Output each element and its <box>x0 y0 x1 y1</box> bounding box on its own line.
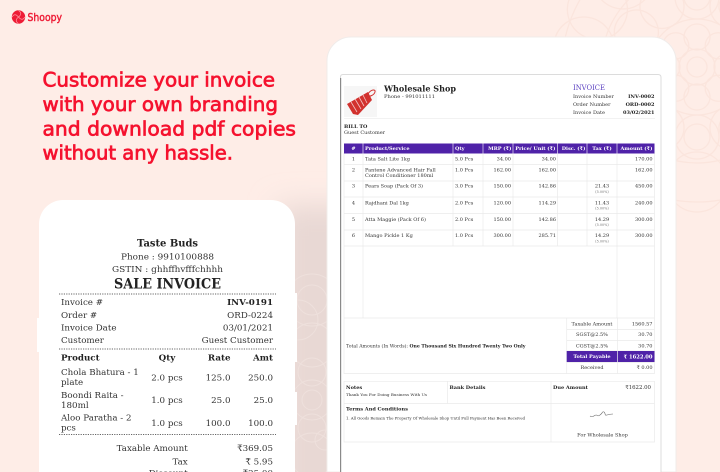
table rows: 1.0 Pcs <box>455 168 474 174</box>
receipt invoice details: INV-0191 <box>227 298 273 308</box>
table header row: Qty <box>455 146 466 152</box>
table header row: Price/ Unit (₹) <box>515 145 556 152</box>
invoice header: Wholesale Shop <box>383 84 456 94</box>
table rows: (5.00%) <box>595 206 609 210</box>
table rows: Rajdhani Dal 1kg <box>365 200 410 206</box>
panel: receipt <box>37 200 297 472</box>
receipt invoice details: 03/01/2021 <box>223 324 273 334</box>
table rows: 11.43 <box>595 200 609 206</box>
table rows: 5 <box>352 217 355 223</box>
receipt item table: Aloo Paratha - 2 <box>60 414 132 424</box>
receipt header <box>112 237 223 292</box>
total payable: Total Payable <box>573 354 611 360</box>
table rows: Mango Pickle 1 Kg <box>365 233 414 239</box>
receipt header: Phone : 9910100888 <box>121 252 214 262</box>
decorative mandala top right <box>549 0 720 212</box>
table rows <box>352 156 652 244</box>
invoice header: ORD-0002 <box>626 102 655 108</box>
table rows: 300.00 <box>494 233 511 239</box>
table rows: 2.0 Pcs <box>455 217 474 223</box>
headline: without any hassle. <box>42 142 233 164</box>
totals block: 30.70 <box>638 343 652 349</box>
receipt invoice details: Order # <box>61 311 97 321</box>
receipt item table: Chola Bhatura - 1 <box>61 368 139 378</box>
receipt invoice details: Invoice # <box>61 298 103 308</box>
receipt item table: Amt <box>252 354 273 364</box>
invoice header: Invoice Number <box>573 94 614 100</box>
tablet side shadow <box>278 205 358 472</box>
bill to: BILL TO <box>344 124 368 130</box>
notes and signature block <box>344 381 654 442</box>
receipt item table: Qty <box>159 354 176 364</box>
totals block: Received <box>580 365 604 371</box>
table header row: Tax (₹) <box>592 145 612 152</box>
terms: Terms And Conditions <box>346 406 408 412</box>
bank details: Bank Details <box>450 385 486 391</box>
invoice header: Order Number <box>573 102 611 108</box>
table rows: 2 <box>352 168 355 174</box>
receipt invoice details: Customer <box>61 336 105 346</box>
tablet body <box>327 37 676 472</box>
receipt invoice details: Invoice Date <box>61 324 116 334</box>
totals block <box>344 318 654 374</box>
receipt item table: pcs <box>61 424 76 434</box>
receipt item table: 180ml <box>61 401 89 411</box>
receipt item table: Product <box>61 354 100 364</box>
table rows: 5.0 Pcs <box>455 156 474 162</box>
headline: Customize your invoice <box>42 69 275 92</box>
totals block: One Thousand Six Hundred Twenty Two Only <box>410 343 527 349</box>
receipt invoice details: ORD-0224 <box>227 311 273 321</box>
totals block: 30.70 <box>638 332 652 338</box>
receipt invoice details: Guest Customer <box>202 336 274 346</box>
decorative mandala lower centre <box>278 274 338 472</box>
receipt card <box>39 200 297 472</box>
table grid <box>344 153 654 318</box>
table rows: 162.00 <box>635 168 652 174</box>
receipt totals: ₹369.05 <box>237 444 273 454</box>
table header row: Disc. (₹) <box>562 145 586 152</box>
invoice sheet left edge <box>340 78 342 472</box>
headline: with your own branding <box>42 93 278 116</box>
logo <box>12 10 62 24</box>
table rows: 21.43 <box>595 184 609 190</box>
invoice content <box>344 83 655 442</box>
totals block: ₹ 0.00 <box>637 365 652 371</box>
bill to: Guest Customer <box>344 130 386 136</box>
table header row: Amount (₹) <box>619 145 652 152</box>
receipt item table: 125.0 <box>206 374 230 384</box>
table rows: Pears Soap (Pack Of 3) <box>365 182 423 190</box>
receipt totals: Tax <box>172 457 188 467</box>
receipt item table: Rate <box>208 354 231 364</box>
table rows: 150.00 <box>494 217 511 223</box>
table rows: 150.00 <box>494 184 511 190</box>
table rows: 3 <box>352 184 355 190</box>
table header row: Product/Service <box>365 146 410 152</box>
table header row: MRP (₹) <box>488 145 512 152</box>
receipt totals: ₹ 5.95 <box>245 457 273 467</box>
invoice header: Invoice Date <box>573 110 605 116</box>
headline: and download pdf copies <box>42 118 296 140</box>
amount in words: Total Amounts (In Words): <box>346 342 408 349</box>
signatory label: For Wholesale Shop <box>577 433 628 439</box>
total payable <box>567 351 654 362</box>
table header row: # <box>351 146 356 152</box>
due amount: Due Amount <box>553 385 589 391</box>
receipt invoice details <box>61 298 274 346</box>
table rows: Atta Maggie (Pack Of 6) <box>364 216 426 223</box>
icon: Shoopy flower mark <box>12 10 25 24</box>
totals block: SGST@2.5% <box>576 331 608 338</box>
table rows: 2.0 Pcs <box>455 200 474 206</box>
totals block: 1560.57 <box>632 321 652 327</box>
table rows: 142.86 <box>538 217 556 223</box>
table rows: 14.29 <box>595 233 609 239</box>
notes and signature block: Thank You For Doing Business With Us <box>346 392 427 397</box>
table rows: 162.00 <box>494 168 511 174</box>
table rows: 1 <box>352 156 355 162</box>
notes and signature block: 1. All Goods Remain The Property Of Wholesale Shop Until Full Payment Has Been Received <box>346 416 526 420</box>
table rows: 300.00 <box>635 233 652 239</box>
bill to <box>344 124 386 136</box>
table rows: 142.86 <box>538 184 556 190</box>
table rows: 14.29 <box>595 217 609 223</box>
invoice table <box>344 144 654 318</box>
table rows: 300.00 <box>635 217 652 223</box>
receipt item table: 1.0 pcs <box>151 396 183 406</box>
table rows: 6 <box>352 233 355 239</box>
invoice header: INV-0002 <box>628 94 655 100</box>
receipt header: SALE INVOICE <box>114 276 221 292</box>
logo wordmark: Shoopy <box>28 12 62 24</box>
table rows: 4 <box>352 200 355 206</box>
receipt item table: plate <box>61 378 83 388</box>
invoice header <box>344 83 655 117</box>
table rows: 114.29 <box>538 200 556 206</box>
table rows: Control Conditioner 180ml <box>365 173 434 179</box>
receipt item table: 25.0 <box>211 396 230 406</box>
receipt white edge strip <box>37 318 43 352</box>
invoice header: INVOICE <box>573 83 605 92</box>
invoice sheet <box>340 74 661 472</box>
receipt item table: 100.0 <box>248 419 273 429</box>
signature <box>590 412 613 417</box>
receipt header: Taste Buds <box>137 237 198 249</box>
table rows: 450.00 <box>635 184 652 190</box>
table rows: 3.0 Pcs <box>455 184 474 190</box>
notes: Notes <box>346 385 362 391</box>
receipt item table <box>60 354 273 434</box>
receipt item table: Boondi Raita - <box>61 391 124 401</box>
table rows: 34.00 <box>542 156 556 162</box>
panel: tablet <box>327 37 676 472</box>
receipt totals <box>117 444 273 472</box>
table rows: (5.00%) <box>595 223 609 227</box>
receipt totals: Taxable Amount <box>117 444 188 454</box>
table rows: 1.0 Pcs <box>455 233 474 239</box>
headline <box>42 69 296 164</box>
table rows: Tata Salt Lite 1kg <box>365 156 411 162</box>
invoice header: 03/02/2021 <box>623 110 654 116</box>
table rows: 162.00 <box>538 168 556 174</box>
receipt item table: 250.0 <box>248 374 273 384</box>
receipt item table: 1.0 pcs <box>151 419 183 429</box>
invoice header: Phone - 991011111 <box>384 94 435 100</box>
table rows: 120.00 <box>494 200 511 206</box>
receipt item table: 2.0 pcs <box>151 374 183 384</box>
receipt item table: 25.0 <box>254 396 273 406</box>
table rows: 240.00 <box>635 200 652 206</box>
table rows: (5.00%) <box>595 240 609 244</box>
table rows: (5.00%) <box>595 190 609 194</box>
icon: price tag logo <box>344 86 377 117</box>
table rows: 34.00 <box>497 156 511 162</box>
receipt header: GSTIN : ghhffhvfffchhhh <box>112 265 223 275</box>
table rows: 285.71 <box>538 233 556 239</box>
table header row <box>344 144 654 154</box>
table rows: Pantene Advanced Hair Fall <box>365 168 436 174</box>
total payable: ₹ 1622.00 <box>624 354 653 360</box>
receipt item table: 100.0 <box>206 419 230 429</box>
notes and signature block: ₹1622.00 <box>625 385 652 391</box>
totals block: Taxable Amount <box>572 321 612 327</box>
table rows: 170.00 <box>635 156 652 162</box>
totals block: CGST@2.5% <box>576 342 608 349</box>
